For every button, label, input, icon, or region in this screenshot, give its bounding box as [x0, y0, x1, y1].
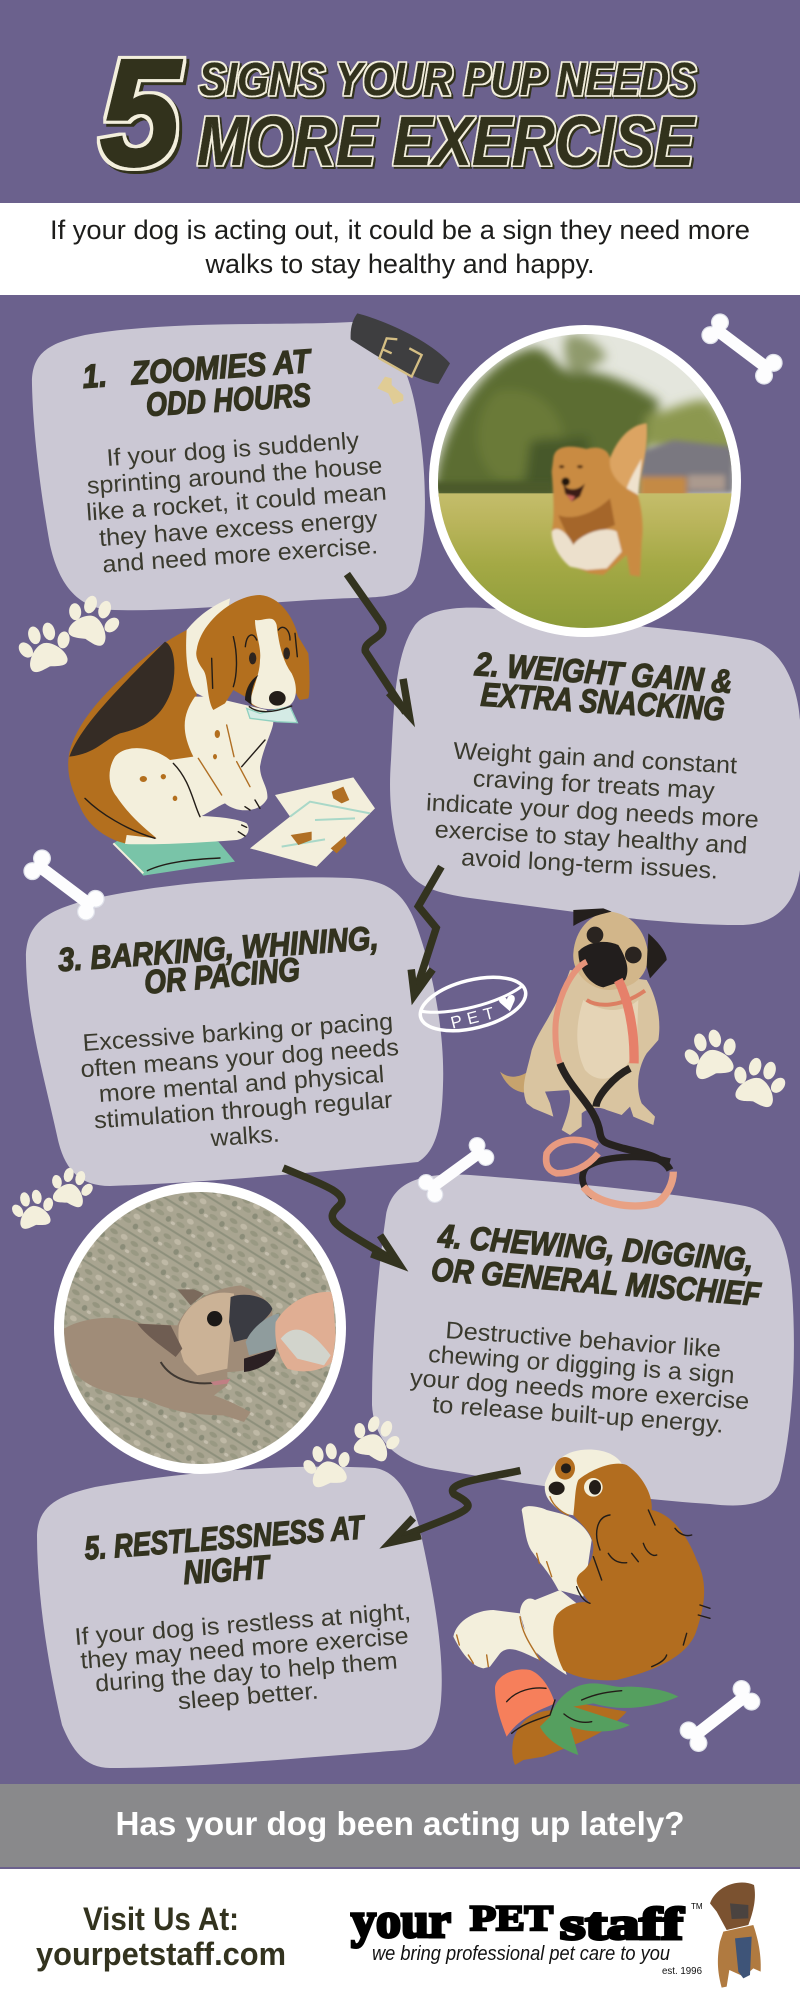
cream neck, chest and legs: [110, 598, 273, 844]
visit us text: [36, 1901, 286, 1972]
icon: bone middle: [415, 1134, 497, 1206]
call to action band: [0, 1784, 800, 1869]
panel: sign 4: [372, 1174, 794, 1505]
logo: est. 1996: [662, 1966, 702, 1977]
icon: bone bottom right: [677, 1677, 763, 1755]
boxer dog with tie: [710, 1882, 761, 1988]
footer: [0, 1869, 800, 2000]
heading: sign 3: OR PACING: [143, 950, 301, 1001]
chest: [522, 1506, 592, 1597]
photo: golden retriever running: [429, 325, 741, 637]
logo: your: [351, 1892, 451, 1948]
intro band: walks to stay healthy and happy.: [204, 249, 594, 279]
icon: pet bowl: [415, 968, 531, 1040]
body text: sign 1: they have excess energy: [98, 506, 378, 552]
visit us text: yourpetstaff.com: [36, 1936, 286, 1972]
icon: dog collar with bone tag: [351, 313, 450, 404]
arrow: 3 to 4: [283, 1168, 399, 1264]
leash: [546, 962, 673, 1206]
arrow: 1 to 2: [347, 574, 409, 715]
book: [113, 835, 235, 876]
body text: sign 3: Excessive barking or pacing: [82, 1008, 394, 1057]
title: SIGNS YOUR PUP NEEDS: [199, 53, 696, 105]
heading: sign 2: 2. WEIGHT GAIN &: [473, 645, 734, 700]
panel: sign 2: [390, 608, 800, 925]
logo: we bring professional pet care to you: [372, 1943, 670, 1965]
panel: sign 5: [37, 1467, 442, 1768]
illustration: basset hound with letters: [68, 595, 375, 876]
body text: sign 2: indicate your dog needs more: [425, 789, 759, 834]
heading: sign 1: [81, 342, 314, 423]
body text: sign 2: [423, 736, 762, 887]
heading: sign 4: 4. CHEWING, DIGGING,: [436, 1217, 755, 1278]
icon: bone left: [21, 847, 107, 923]
call to action band: Has your dog been acting up lately?: [116, 1805, 684, 1842]
tail fluff: [453, 1610, 540, 1668]
heading: sign 2: [473, 645, 734, 727]
icon: bone top right: [699, 311, 785, 387]
face details: [457, 1457, 710, 1667]
brown body: [68, 630, 197, 843]
head: [545, 1449, 622, 1517]
icon: paw prints above bulldog photo: [7, 1164, 98, 1231]
body text: sign 1: If your dog is suddenly: [106, 427, 360, 472]
heading: sign 3: 3. BARKING, WHINING,: [57, 919, 380, 978]
french bulldog: [64, 1285, 281, 1422]
title: MORE EXERCISE: [197, 102, 696, 180]
body text: sign 2: avoid long-term issues.: [461, 844, 719, 885]
spots and fur marks: [85, 725, 265, 838]
heading: sign 5: 5. RESTLESSNESS AT: [83, 1508, 367, 1567]
body text: sign 4: chewing or digging is a sign: [427, 1341, 735, 1389]
torn letters: [250, 777, 375, 867]
logo: staff: [560, 1898, 684, 1949]
pug body: [524, 970, 659, 1135]
body text: sign 1: and need more exercise.: [102, 532, 379, 578]
body text: sign 5: [74, 1598, 417, 1723]
body text: sign 5: If your dog is restless at night,: [74, 1598, 412, 1651]
heading: sign 5: NIGHT: [182, 1548, 273, 1591]
carrot toy: [495, 1669, 678, 1765]
illustration: pug holding leash: [500, 908, 673, 1206]
arrow: 4 to 5: [390, 1471, 520, 1542]
panel: sign 3: [26, 877, 443, 1186]
heading: sign 5: [83, 1508, 367, 1591]
title: 5: [100, 28, 182, 198]
logo: TM: [691, 1902, 703, 1911]
photo: french bulldog tugging toy: [54, 1182, 347, 1475]
dark saddle: [69, 642, 174, 757]
panel: sign 1: [32, 322, 425, 610]
brown coat and ear: [553, 1464, 704, 1680]
arrow: 2 to 3: [411, 867, 441, 995]
body text: sign 4: to release built-up energy.: [431, 1391, 724, 1439]
body text: sign 1: like a rocket, it could mean: [85, 479, 388, 526]
body text: sign 2: exercise to stay healthy and: [434, 816, 748, 860]
body text: sign 3: walks.: [209, 1121, 280, 1152]
pug tail: [500, 1072, 528, 1093]
illustration: cavalier spaniel with carrot toy: [453, 1449, 710, 1765]
body text: sign 2: Weight gain and constant: [453, 738, 738, 780]
visit us text: Visit Us At:: [83, 1901, 239, 1937]
heading: sign 1: ODD HOURS: [145, 376, 312, 423]
body text: sign 4: [407, 1315, 754, 1440]
body text: sign 5: they may need more exercise: [79, 1622, 410, 1675]
pug head: [573, 908, 667, 990]
icon: paw prints right of pug: [678, 1024, 792, 1111]
body text: sign 5: sleep better.: [177, 1678, 320, 1715]
body text: sign 1: sprinting around the house: [86, 452, 383, 500]
rear cream: [520, 1590, 577, 1675]
body text: sign 3: [78, 1008, 405, 1161]
heading: sign 3: [57, 919, 380, 1001]
logo: PET: [470, 1898, 553, 1938]
body text: sign 1: [82, 426, 391, 579]
intro band: [0, 203, 800, 295]
body text: sign 4: your dog needs more exercise: [409, 1365, 750, 1415]
body text: sign 5: during the day to help them: [94, 1647, 398, 1698]
body text: sign 4: Destructive behavior like: [445, 1317, 722, 1363]
icon: paw prints between panels 4 and 5: [298, 1410, 407, 1490]
body text: sign 2: craving for treats may: [472, 765, 715, 805]
heading: sign 2: EXTRA SNACKING: [480, 676, 726, 727]
heading: sign 1: 1. ZOOMIES AT: [81, 342, 314, 395]
body text: sign 3: more mental and physical: [98, 1061, 385, 1108]
icon: pet bowl: PET: [449, 1004, 496, 1033]
intro band: If your dog is acting out, it could be a sign they need more: [50, 215, 750, 245]
heading: sign 4: [430, 1217, 763, 1313]
body text: sign 3: often means your dog needs: [80, 1034, 400, 1083]
icon: paw prints by basset: [12, 589, 127, 676]
body text: sign 3: stimulation through regular: [93, 1087, 393, 1134]
head: [196, 595, 310, 723]
title: [100, 28, 696, 198]
logo: [351, 1892, 703, 1977]
golden retriever: [552, 423, 647, 577]
